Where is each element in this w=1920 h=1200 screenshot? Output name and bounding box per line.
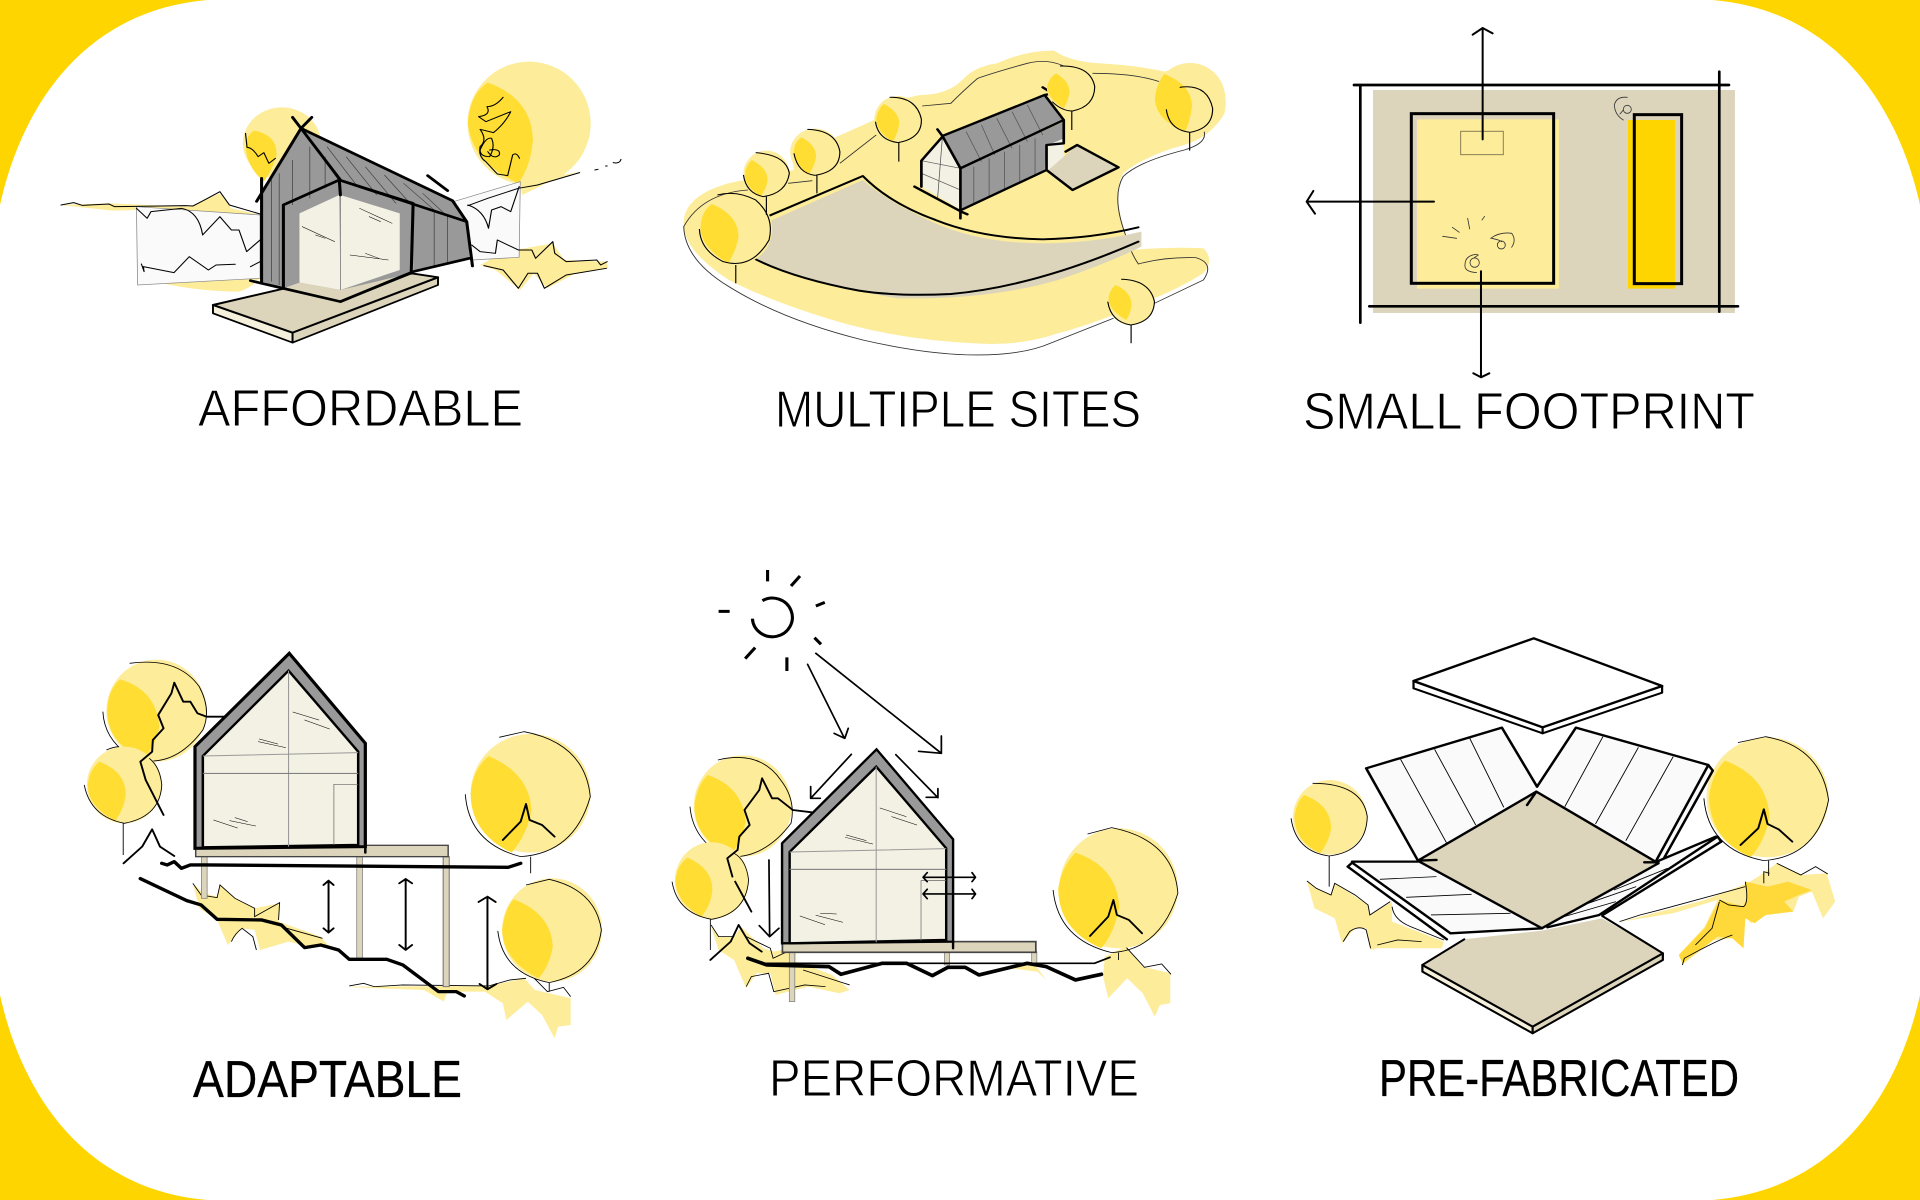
heading: PERFORMATIVE: PERFORMATIVE [769,1050,1139,1108]
heading: PRE-FABRICATED: PRE-FABRICATED [1379,1050,1739,1108]
panel: floor square [1418,792,1658,928]
panel: roof lid [1414,638,1662,733]
ground: datum line [760,957,1110,963]
heading: MULTIPLE SITES: MULTIPLE SITES [775,381,1141,439]
ground: right yellow terrain [1620,863,1835,965]
panel: pre-fabricated [1291,638,1835,1033]
ground: thick terrain lines [748,958,1101,980]
road: tan driveway [756,176,1141,298]
plan: scribble marks [1443,97,1631,273]
house: cabin in perspective [250,117,472,302]
arrows: variable heights [324,879,496,989]
house: gable section [782,749,953,948]
trees: three round trees [672,755,1178,960]
arrows: solar rays [759,653,941,937]
panel: affordable [60,62,621,343]
site plan: tan plot [1373,90,1735,313]
panel: small footprint [1307,28,1738,377]
ground: right terrain with white section panel [453,159,621,290]
panel: adaptable [84,653,602,1038]
section: columns and deck [196,845,449,987]
panel: right wall leaf [1536,728,1713,862]
ground: left terrain with white section panel [60,192,260,292]
ground: yellow terrain [193,883,571,1038]
heading: ADAPTABLE: ADAPTABLE [193,1051,462,1109]
plan: site boundary lines [1354,72,1738,323]
panel: base slab [1422,916,1663,1033]
scribbles: tree trunks and branches [124,683,555,863]
panel: front left wall leaf [1348,862,1542,939]
site outline: offset contour [684,61,1208,355]
panel: front right wall leaf [1542,837,1721,928]
arrows: cross ventilation [923,873,975,899]
section: deck and columns [782,942,1037,1002]
slab: entry platform [213,273,438,343]
house: gable section [195,653,365,853]
ground: yellow terrain [711,925,1171,1017]
heading: SMALL FOOTPRINT: SMALL FOOTPRINT [1303,383,1755,441]
plan: yellow main room [1411,114,1559,289]
site blob: yellow land area [684,51,1226,344]
icon: left tree [243,107,321,182]
ground: left yellow terrain [1307,881,1444,950]
house: small cabin [914,87,1118,218]
ground: thick terrain lines [140,862,521,996]
plan: yellow narrow room [1628,115,1682,289]
trees: left and right [1291,737,1829,887]
arrows: outward expansion [1307,28,1493,377]
panel: multiple sites [684,51,1226,355]
panel: performative [672,570,1178,1017]
icon: sun [719,570,825,671]
trees: four round trees [84,660,602,992]
icon: right tree [467,62,591,185]
trees: six circular trees [699,63,1225,343]
heading: AFFORDABLE: AFFORDABLE [198,380,523,438]
scribbles: trunks and branches [710,778,1142,960]
panel: left wall leaf [1366,728,1537,861]
